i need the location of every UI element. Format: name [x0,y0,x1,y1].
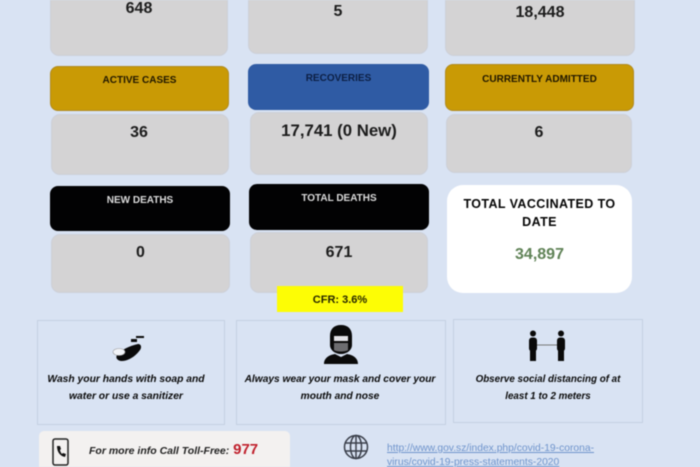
vaccinated heading: DATE [522,215,557,229]
website link [386,443,594,467]
card: currently admitted value [446,114,632,173]
callout: case fatality rate: CFR: 3.6% [313,294,367,306]
card: active cases value [51,114,229,175]
vaccinated heading: TOTAL VACCINATED TO [463,197,616,211]
social distancing text [475,374,622,402]
wash hands text: water or use a sanitizer [69,391,183,402]
header: active cases [50,66,229,111]
wear mask text: Always wear your mask and cover your [245,374,435,385]
header: recoveries: RECOVERIES [306,73,371,84]
header: active cases: ACTIVE CASES [103,75,176,86]
contact box: toll-free number [39,431,290,467]
card: total deaths value [250,232,428,293]
icon: two people apart [528,330,566,362]
card: total deaths value: 671 [326,244,352,261]
card: recoveries value [250,112,428,175]
website link: http://www.gov.sz/index.php/covid-19-corona- [387,443,594,454]
header: new deaths [50,186,230,231]
card: new deaths value [51,234,230,293]
card: currently admitted value: 6 [535,124,543,141]
card: top left value: 648 [126,0,152,17]
card: new deaths value: 0 [136,244,145,261]
card: top middle value [248,0,428,54]
social distancing text: Observe social distancing of at [476,374,620,385]
social distancing text: least 1 to 2 meters [505,391,591,402]
wash hands text [47,374,206,402]
icon: person wearing mask [323,324,359,365]
card: top middle value: 5 [334,3,342,20]
header: new deaths: NEW DEATHS [107,195,173,206]
toll-free text: For more info Call Toll-Free: 977 [89,441,258,458]
panel: wear mask [236,320,446,425]
card: total vaccinated to date [447,185,632,293]
callout: case fatality rate [277,286,403,312]
header: currently admitted [445,64,634,111]
header: recoveries [248,64,429,110]
card: active cases value: 36 [130,124,148,141]
vaccinated number: 34,897 [515,246,564,263]
vaccinated heading [462,197,616,229]
panel: social distancing [453,319,643,423]
header: total deaths [249,184,429,230]
card: top right value: 18,448 [516,4,564,21]
header: total deaths: TOTAL DEATHS [301,193,377,204]
card: top left value [50,0,228,56]
wear mask text [244,374,436,402]
card: top right value [445,0,635,56]
icon: globe [343,434,369,460]
card: recoveries value: 17,741 (0 New) [281,121,397,140]
panel: wash hands [37,320,225,425]
wear mask text: mouth and nose [301,391,379,402]
header: currently admitted: CURRENTLY ADMITTED [482,74,597,85]
icon: phone [51,437,70,467]
icon: washing hands [112,335,145,362]
wash hands text: Wash your hands with soap and [47,374,205,385]
